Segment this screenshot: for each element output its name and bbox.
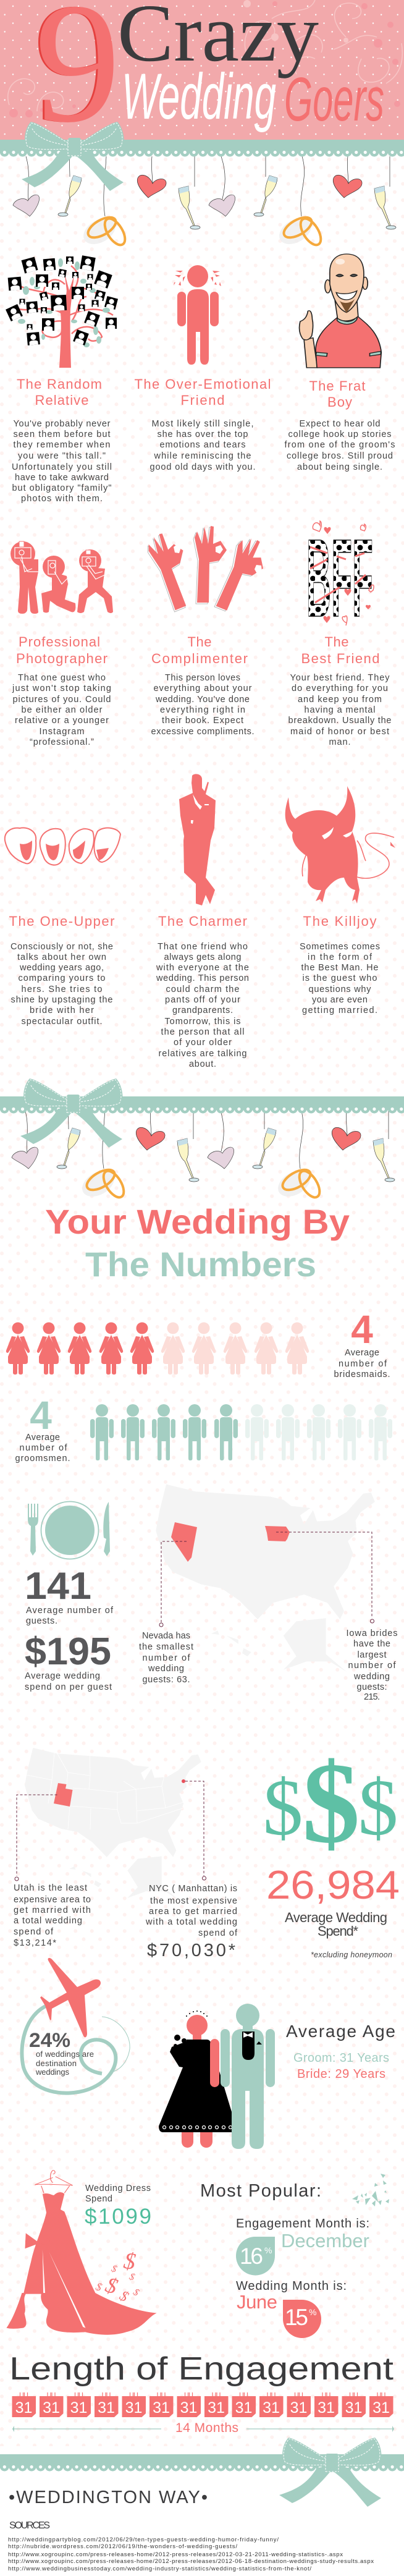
- stat: guests: 141: [25, 1565, 91, 1608]
- text: average age: [286, 2022, 395, 2081]
- ribbon band middle: [0, 1096, 404, 1114]
- heading: The Frat Boy: [309, 378, 366, 410]
- text: Iowa: largest: [357, 1650, 387, 1660]
- text: the charmer: the person that all: [161, 1027, 245, 1037]
- text: NYC: area to get married: [149, 1907, 237, 1917]
- text: frat boy: college hook up stories: [288, 430, 392, 439]
- icon: falling dollar signs: $: [128, 2271, 136, 2283]
- text: random relative: [12, 419, 112, 504]
- icon: falling dollar signs: $: [117, 2288, 131, 2305]
- text: average age: Bride: 29 Years: [297, 2067, 385, 2081]
- NYC marker: [182, 1779, 185, 1783]
- stat: wedding dress spend: Wedding Dress: [85, 2184, 151, 2193]
- text: Iowa: have the: [353, 1639, 390, 1649]
- calendar row: 31: [153, 2399, 170, 2417]
- heading: The Best Friend: The: [325, 634, 348, 650]
- text: random relative: You've probably never: [14, 419, 111, 429]
- calendar row: 31: [372, 2399, 390, 2417]
- text: random relative: but obligatory "family": [12, 483, 111, 493]
- text: the one-upper: [11, 942, 113, 1027]
- text: Iowa: number of: [348, 1661, 396, 1671]
- heading: Professional Photographer: Photographer: [16, 651, 107, 666]
- ribbon band bottom: [0, 2454, 404, 2472]
- stat: destination weddings: weddings: [35, 2067, 69, 2077]
- text: the charmer: Tomorrow, this is: [164, 1017, 241, 1027]
- text: Iowa: 215.: [364, 1692, 380, 1702]
- heading: Professional Photographer: [16, 634, 107, 666]
- text: professional photographer: just won't stop taking: [12, 684, 111, 693]
- callout line: Nevada: [159, 1541, 187, 1627]
- Iowa state: [265, 1526, 290, 1541]
- text: the killjoy: getting married.: [302, 1006, 377, 1015]
- text: the killjoy: you are even: [312, 995, 368, 1005]
- text: Iowa: Iowa brides: [346, 1629, 398, 1638]
- callout line: Utah: [15, 1795, 57, 1881]
- text: over-emotional friend: while reminiscing the: [153, 451, 251, 461]
- stat: bridesmaids: bridesmaids.: [334, 1370, 390, 1379]
- text: Nevada: [139, 1631, 193, 1685]
- text: frat boy: Expect to hear old: [299, 419, 381, 429]
- text: Nevada: wedding: [148, 1664, 184, 1674]
- text: professional photographer: That one guest who: [18, 673, 106, 683]
- text: the killjoy: questions why: [309, 985, 371, 994]
- heading: The Frat Boy: Boy: [327, 394, 352, 410]
- icon: dollar signs: $: [358, 1763, 398, 1852]
- icon: falling dollar signs: $: [132, 2287, 141, 2298]
- ribbon bow middle: [20, 1078, 123, 1148]
- stat: engagement month: December: [281, 2230, 369, 2252]
- calendar row: 31: [43, 2399, 60, 2417]
- groomsmen figures: [90, 1404, 392, 1460]
- text: the best friend: breakdown. Usually the: [288, 716, 392, 726]
- stat: per guest spend: $195: [25, 1630, 111, 1673]
- text: random relative: have to take awkward: [15, 473, 109, 483]
- arrow: 14 months span: [12, 2421, 394, 2435]
- text: the charmer: of your older: [174, 1038, 232, 1048]
- heading: The Complimenter: [151, 634, 248, 666]
- text: Nevada: number of: [142, 1653, 190, 1663]
- heading: The Over-Emotional Friend: Friend: [180, 392, 225, 408]
- icon: masks: [5, 828, 120, 865]
- calendar row: 31: [180, 2399, 197, 2417]
- callout line: NYC: [185, 1781, 206, 1880]
- icon: killjoy devil: [285, 786, 395, 904]
- teardrop 15 percent: %: [309, 2307, 316, 2317]
- stat: destination weddings: 24%: [29, 2029, 70, 2051]
- text: over-emotional friend: emotions and tears: [159, 440, 246, 450]
- text: the best friend: having a mental: [304, 705, 376, 715]
- stat: destination weddings: of weddings are: [36, 2049, 94, 2059]
- text: the complimenter: This person loves: [165, 673, 240, 683]
- text: the killjoy: the Best Man. He: [301, 963, 378, 973]
- heading: The Complimenter: The: [188, 634, 211, 650]
- source links: [8, 2536, 374, 2572]
- text: the charmer: grandparents.: [172, 1006, 233, 1015]
- teardrop 15 percent: 15: [285, 2305, 308, 2330]
- title word Wedding: Wedding: [122, 61, 276, 133]
- stat: wedding month: Wedding Month is:: [236, 2279, 347, 2293]
- heading: The Frat Boy: The Frat: [309, 378, 366, 394]
- source links: http://www.xogroupinc.com/press-releases-home/2012-press-releases/2012-03-21-2011-wedding-statistics-.aspx: [8, 2551, 343, 2558]
- heading: The One-Upper: The One-Upper: [9, 913, 115, 929]
- stat: bridesmaids: 4: [351, 1307, 373, 1352]
- hanging ornaments middle: [12, 1109, 395, 1202]
- icon: ok hands: [143, 526, 272, 618]
- text: professional photographer: Instagram: [40, 727, 84, 737]
- pink header panel: [0, 0, 404, 140]
- bride: [159, 2010, 236, 2148]
- filigree decoration left: [8, 78, 76, 117]
- stat: per guest spend: [25, 1630, 112, 1692]
- text: the charmer: That one friend who: [158, 942, 248, 952]
- plane: [40, 1958, 101, 2037]
- text: frat boy: [284, 419, 395, 472]
- text: the charmer: [156, 942, 249, 1069]
- text: NYC: spend of: [198, 1928, 238, 1938]
- calendar row: 31: [208, 2399, 225, 2417]
- stat: guests: Average number of: [26, 1606, 114, 1616]
- stat: guests: [25, 1565, 114, 1626]
- icon: frat boy: [300, 254, 381, 368]
- text: the complimenter: their book. Expect: [162, 716, 243, 726]
- text: the one-upper: talks about her own: [17, 952, 106, 962]
- text: NYC: $70,030*: [147, 1941, 235, 1960]
- bridesmaid figures: [6, 1323, 309, 1375]
- icon: family tree: [6, 255, 118, 368]
- heading: Length of Engagement: Length of Engagement: [9, 2351, 394, 2387]
- stat: groomsmen: number of: [20, 1443, 67, 1453]
- filigree decoration top right: [243, 0, 402, 107]
- teardrop 16 percent: %: [264, 2245, 272, 2255]
- stat: engagement month: [236, 2217, 369, 2276]
- stat: groomsmen: 4: [30, 1393, 52, 1438]
- text: random relative: Unfortunately you still: [12, 462, 112, 472]
- heading: The Random Relative: [17, 376, 102, 408]
- source links: http://nubride.wordpress.com/2012/06/19/the-wonders-of-wedding-guests/: [8, 2543, 237, 2550]
- stat: bridesmaids: number of: [339, 1359, 387, 1369]
- text: Nevada: the smallest: [139, 1642, 193, 1652]
- text: Nevada: guests: 63.: [142, 1675, 190, 1685]
- stat: average wedding spend: [266, 1862, 400, 1959]
- header banner: [0, 0, 404, 158]
- heading: The Over-Emotional Friend: The Over-Emotional: [135, 376, 271, 392]
- text: over-emotional friend: good old days with you.: [149, 462, 256, 472]
- map: Nevada and Iowa: [156, 1485, 375, 1672]
- text: Iowa: wedding: [353, 1672, 390, 1682]
- text: the killjoy: in the form of: [308, 952, 372, 962]
- heading: The Killjoy: The Killjoy: [303, 913, 377, 929]
- text: random relative: photos with them.: [21, 494, 103, 504]
- heading: The Random Relative: Relative: [35, 392, 89, 408]
- stat: destination weddings: destination: [36, 2059, 77, 2068]
- text: the complimenter: excessive compliments.: [151, 727, 255, 737]
- Nevada state: [171, 1522, 197, 1562]
- section heading: Your Wedding By: Your Wedding By: [45, 1202, 350, 1241]
- source links: http://weddingpartyblog.com/2012/06/29/ten-types-guests-wedding-humor-friday-funny/: [8, 2536, 279, 2543]
- text: the charmer: about.: [189, 1059, 216, 1069]
- section heading: The Numbers: The Numbers: [85, 1245, 316, 1284]
- stat: average wedding spend: Average Wedding: [285, 1910, 387, 1925]
- source links: http://www.weddingbusinesstoday.com/wedding-industry-statistics/wedding-statistics-from-the-knot/: [8, 2565, 311, 2572]
- text: the one-upper: comparing yours to: [19, 973, 105, 983]
- calendar row: 31: [263, 2399, 280, 2417]
- icon: charmer silhouette: [179, 774, 216, 905]
- text: over-emotional friend: [149, 419, 256, 472]
- stat: engagement month: Engagement Month is:: [236, 2217, 369, 2231]
- text: the charmer: relatives are talking: [158, 1049, 247, 1059]
- stat: guests: guests.: [26, 1616, 57, 1626]
- ribbon bow bottom: [279, 2438, 382, 2507]
- icon: bride and groom: [159, 2004, 275, 2149]
- calendar row: 31: [98, 2399, 115, 2417]
- map: Utah and NYC: [25, 1748, 201, 1900]
- text: professional photographer: [12, 673, 111, 747]
- icon: falling dollar signs: $: [94, 2280, 104, 2294]
- text: Utah: a total wedding: [14, 1916, 82, 1926]
- text: the killjoy: Sometimes comes: [300, 942, 380, 952]
- heading: The Random Relative: The Random: [17, 376, 102, 392]
- icon: wedding dress on hanger: [6, 2171, 157, 2335]
- source links: http://www.xogroupinc.com/press-releases-home/2012-press-releases/2012-06-18-destination-weddings-study-results.aspx: [8, 2558, 374, 2565]
- stat: wedding month: June: [237, 2291, 277, 2313]
- text: Utah: spend of: [14, 1927, 54, 1937]
- icon: falling dollar signs: $: [122, 2248, 137, 2275]
- ribbon bow top: [22, 122, 124, 191]
- teardrop 16 percent: 16: [240, 2243, 263, 2269]
- icon: destination loop and plane: [22, 1958, 130, 2093]
- text: the best friend: maid of honor or best: [290, 727, 389, 737]
- text: Utah: expensive area to: [14, 1895, 91, 1905]
- icon: crying person: [174, 265, 221, 365]
- heading: The Charmer: The Charmer: [158, 913, 247, 929]
- text: average age: Average Age: [286, 2022, 395, 2041]
- icon: falling dollar signs: $: [110, 2263, 118, 2275]
- icon: BFF letters with hearts: [306, 516, 374, 640]
- text: Nevada: Nevada has: [142, 1631, 190, 1641]
- text: Utah: Utah is the least: [14, 1883, 87, 1893]
- text: the complimenter: everything right in: [160, 705, 245, 715]
- text: frat boy: about being single.: [297, 462, 382, 472]
- heading: The Best Friend: [301, 634, 379, 666]
- arrow: 14 months span: 14 Months: [175, 2421, 238, 2435]
- text: the one-upper: shine by upstaging the: [11, 995, 112, 1005]
- text: the one-upper: Consciously or not, she: [11, 942, 113, 952]
- stat: wedding dress spend: $1099: [85, 2205, 151, 2229]
- heading: The Best Friend: Best Friend: [301, 651, 379, 666]
- logo: Weddington Way: •WEDDINGTON WAY•: [9, 2488, 208, 2507]
- text: frat boy: college bros. Still proud: [287, 451, 393, 461]
- text: the charmer: always gets along: [164, 952, 241, 962]
- stat: bridesmaids: Average: [345, 1348, 379, 1358]
- text: the charmer: wedding. This person: [156, 973, 249, 983]
- text: the one-upper: wedding years ago,: [19, 963, 104, 973]
- text: Utah: [14, 1883, 91, 1948]
- text: over-emotional friend: she has over the top: [157, 430, 248, 439]
- teardrop 15 percent: [283, 2300, 321, 2338]
- stat: per guest spend: Average wedding: [25, 1671, 100, 1681]
- icon: photographers: [11, 541, 113, 614]
- icon: falling dollar signs: [94, 2248, 141, 2305]
- text: professional photographer: be either an older: [21, 705, 103, 715]
- text: the best friend: do everything for you: [292, 684, 388, 693]
- text: Utah: get married with: [14, 1905, 91, 1915]
- stat: wedding month: [236, 2279, 347, 2338]
- heading: Professional Photographer: Professional: [19, 634, 100, 650]
- stat: destination weddings: [29, 2029, 94, 2077]
- calendar row: 31: [345, 2399, 362, 2417]
- text: Iowa: [346, 1629, 398, 1702]
- text: the killjoy: [300, 942, 380, 1015]
- text: the complimenter: everything about your: [153, 684, 252, 693]
- text: NYC: the most expensive: [150, 1896, 237, 1906]
- calendar row: 31: [70, 2399, 87, 2417]
- calendar row: [12, 2392, 393, 2417]
- text: Iowa: guests:: [357, 1682, 387, 1692]
- calendar row: 31: [318, 2399, 335, 2417]
- callout line: Iowa: [276, 1532, 374, 1623]
- icon: butterflies: [352, 2174, 389, 2206]
- text: the one-upper: bride with her: [30, 1006, 94, 1015]
- hanging ornaments top: [13, 156, 396, 250]
- text: the best friend: Your best friend. They: [290, 673, 390, 683]
- text: the one-upper: hers. She tries to: [21, 985, 103, 994]
- text: the charmer: could charm the: [166, 985, 240, 994]
- text: random relative: seen them before but: [14, 430, 110, 439]
- icon: dollar signs: $: [263, 1763, 303, 1852]
- calendar row: 31: [125, 2399, 142, 2417]
- icon: falling dollar signs: $: [103, 2272, 120, 2299]
- calendar row: 31: [235, 2399, 252, 2417]
- text: NYC: NYC ( Manhattan) is: [149, 1884, 237, 1894]
- text: the best friend: and keep you from: [298, 695, 382, 705]
- text: Utah: $13,214*: [14, 1938, 56, 1948]
- calendar row: 31: [290, 2399, 307, 2417]
- stat: bridesmaids: [334, 1307, 390, 1379]
- text: the complimenter: [151, 673, 255, 737]
- text: the best friend: man.: [329, 737, 351, 747]
- text: the best friend: [288, 673, 392, 747]
- text: professional photographer: “professional.”: [30, 737, 94, 747]
- icon: dollar signs: $: [302, 1739, 360, 1867]
- stat: wedding dress spend: Spend: [85, 2194, 112, 2204]
- text: frat boy: from one of the groom's: [284, 440, 395, 450]
- text: random relative: they remember when: [14, 440, 110, 450]
- Utah state: [54, 1783, 73, 1807]
- text: professional photographer: pictures of you. Could: [12, 695, 111, 705]
- ribbon band top: [0, 140, 404, 157]
- stat: per guest spend: spend on per guest: [25, 1682, 112, 1692]
- teardrop 16 percent: [236, 2237, 275, 2276]
- heading: Most Popular: Most Popular:: [200, 2181, 321, 2201]
- white footer panel: [0, 2446, 404, 2576]
- text: the one-upper: spectacular outfit.: [21, 1017, 103, 1027]
- groom: [221, 2004, 275, 2149]
- stat: average wedding spend: Spend*: [318, 1923, 358, 1939]
- heading: sources: SOURCES: [9, 2520, 50, 2531]
- text: professional photographer: relative or a younger: [15, 716, 109, 726]
- text: the charmer: with everyone at the: [156, 963, 249, 973]
- heading: The Complimenter: Complimenter: [151, 651, 248, 666]
- stat: average wedding spend: 26,984: [266, 1862, 400, 1907]
- text: the complimenter: wedding. You've done: [155, 695, 250, 705]
- stat: groomsmen: Average: [25, 1433, 60, 1443]
- text: over-emotional friend: Most likely still single,: [152, 419, 253, 429]
- text: the killjoy: is the guest who: [303, 973, 377, 983]
- calendar row: 31: [15, 2399, 32, 2417]
- stat: wedding dress spend: [85, 2184, 151, 2229]
- text: random relative: you were "this tall.": [18, 451, 106, 461]
- stat: groomsmen: groomsmen.: [15, 1454, 70, 1464]
- stat: average wedding spend: *excluding honeymoon: [311, 1951, 392, 1959]
- text: NYC: [145, 1884, 238, 1960]
- heading: The Over-Emotional Friend: [135, 376, 271, 408]
- icon: plate and cutlery: [28, 1502, 110, 1559]
- icon: dollar signs: [263, 1739, 398, 1867]
- text: NYC: with a total wedding: [145, 1917, 237, 1927]
- text: the charmer: pants off of your: [165, 995, 240, 1005]
- stat: groomsmen: [15, 1393, 70, 1464]
- text: average age: Groom: 31 Years: [293, 2051, 389, 2065]
